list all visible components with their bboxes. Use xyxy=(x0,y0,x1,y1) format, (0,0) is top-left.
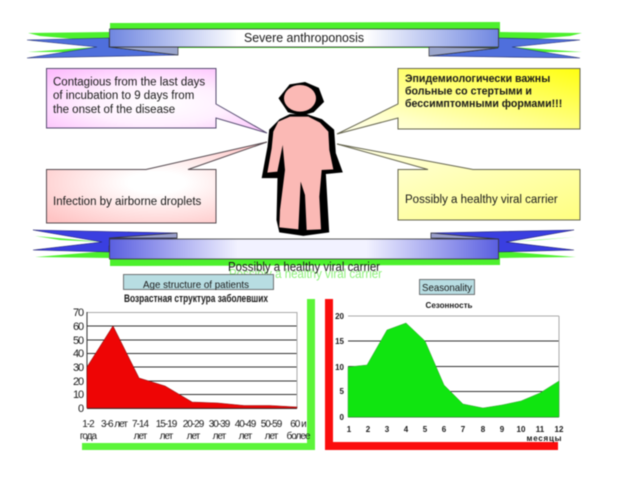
chart: seasonality: 1 xyxy=(347,425,352,434)
chart: seasonality: 5 xyxy=(423,425,428,434)
chart: seasonality: 3 xyxy=(385,425,390,434)
callout: contagious period: Contagious from the last days xyxy=(53,76,205,88)
icon: person xyxy=(263,83,342,235)
chart: age structure: 40 xyxy=(73,348,84,360)
chart: age structure: лет xyxy=(134,431,148,442)
callout: epidemiological importance xyxy=(337,68,580,134)
chart: seasonality: 10 xyxy=(517,425,526,434)
chart: age structure: 20-29 xyxy=(183,419,205,430)
callout: airborne droplets xyxy=(46,142,267,223)
callout: airborne droplets: Infection by airborne droplets xyxy=(53,196,202,208)
chart: seasonality: 7 xyxy=(461,425,466,434)
chart: age structure: лет xyxy=(265,431,279,442)
callout: healthy carrier: Possibly a healthy viral carrier xyxy=(405,194,558,206)
chart: age structure: 50-59 xyxy=(261,419,283,430)
chart: age structure: 30 xyxy=(73,362,84,374)
chart: seasonality: 8 xyxy=(481,425,486,434)
chart: age structure: лет xyxy=(213,431,227,442)
chart: seasonality: 6 xyxy=(442,425,447,434)
bottom banner text: Possibly a healthy viral carrier xyxy=(228,260,380,274)
chart: age structure: лет xyxy=(187,431,201,442)
chart: age structure: 15-19 xyxy=(156,419,178,430)
chart: seasonality: 15 xyxy=(335,337,345,346)
chart: seasonality: 12 xyxy=(555,425,564,434)
chart: age structure: 60 и xyxy=(290,419,306,430)
chart: age structure: лет xyxy=(239,431,253,442)
chart: age structure: 40-49 xyxy=(235,419,257,430)
chart: seasonality: 20 xyxy=(335,312,345,321)
top banner title: Severe anthroponosis xyxy=(244,31,364,45)
chart: age structure xyxy=(73,293,311,442)
chart: seasonality: 2 xyxy=(366,425,371,434)
chart: seasonality xyxy=(335,300,564,443)
bottom banner green shadow text: Possibly a healthy viral carrier xyxy=(229,267,382,281)
chart: age structure: 1-2 xyxy=(82,419,95,430)
chart: age structure: 30-39 xyxy=(209,419,231,430)
callout: epidemiological importance: больные со стертыми и xyxy=(405,86,532,98)
chart: age structure: 20 xyxy=(73,376,84,388)
chart: seasonality: 11 xyxy=(536,425,545,434)
callout: healthy carrier xyxy=(337,144,580,220)
chart: age structure: более xyxy=(286,430,311,442)
chart: age structure: 50 xyxy=(73,335,84,347)
seasonality chart title: Сезонность xyxy=(426,300,472,310)
chart: age structure: 60 xyxy=(73,321,84,333)
label: seasonality: Seasonality xyxy=(422,282,473,294)
chart: age structure: 70 xyxy=(73,307,84,319)
chart: seasonality: 5 xyxy=(340,387,345,396)
callout: contagious period xyxy=(46,68,267,133)
bottom banner xyxy=(33,230,576,281)
callout: epidemiological importance: бессимптомными формами!!! xyxy=(405,98,562,110)
red frame xyxy=(325,299,558,450)
age chart title: Возрастная структура заболевших xyxy=(124,293,269,305)
chart: age structure: 0 xyxy=(78,403,84,415)
chart: age structure: 10 xyxy=(73,389,84,401)
x-axis label: months: месяцы xyxy=(526,434,562,443)
chart: seasonality: 0 xyxy=(340,413,345,422)
label: age structure xyxy=(124,274,274,291)
green frame xyxy=(82,299,315,450)
chart: age structure: года xyxy=(80,431,98,442)
callout: contagious period: of incubation to 9 days from xyxy=(53,90,194,102)
label: age structure: Age structure of patients xyxy=(143,279,249,291)
chart: age structure: 7-14 xyxy=(132,419,149,430)
chart: age structure: 3-6 лет xyxy=(101,419,128,430)
callout: epidemiological importance: Эпидемиологически важны xyxy=(405,73,550,85)
chart: seasonality: 10 xyxy=(335,363,345,372)
chart: seasonality: 9 xyxy=(500,425,505,434)
top banner xyxy=(27,22,582,58)
chart: seasonality: 4 xyxy=(404,425,409,434)
callout: contagious period: the onset of the disease xyxy=(53,104,175,116)
chart: age structure: лет xyxy=(160,431,174,442)
